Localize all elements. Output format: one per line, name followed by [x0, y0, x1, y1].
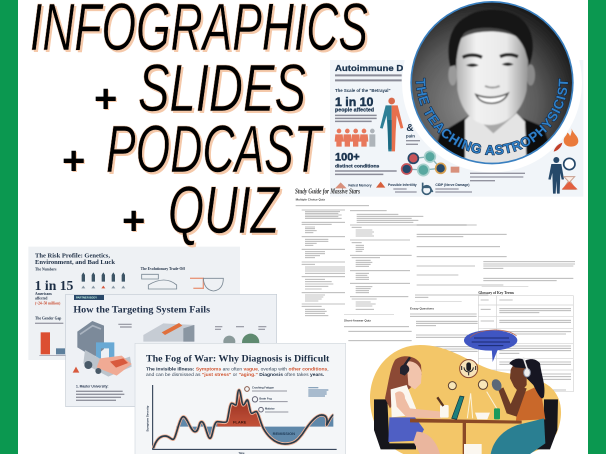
slide heading: The Risk Profile: Genetics, — [35, 254, 111, 260]
icon: failed memory — [335, 182, 347, 188]
section heading: 1. Master University: — [76, 384, 109, 388]
stat label: people affected: people affected — [335, 108, 374, 114]
label: failed memory: Failed Memory — [348, 183, 372, 187]
yellow blob — [370, 345, 561, 454]
white halo behind portrait — [402, 0, 582, 172]
icon: condition network — [402, 151, 459, 176]
table — [410, 419, 522, 454]
nerve damage detail lines — [435, 189, 472, 192]
glossary table — [478, 296, 573, 392]
essay heading: Essay Questions — [410, 307, 434, 311]
label: nerve damage: CIDP (Nerve Damage) — [435, 183, 470, 187]
tablet — [452, 396, 464, 419]
short answer heading: Short-Answer Quiz — [344, 319, 371, 323]
curved name text: THE TEACHING ASTROPHYSICIST — [416, 78, 568, 156]
subheading: gender gap: The Gender Gap — [35, 316, 61, 320]
quiz text column one — [296, 206, 369, 316]
gender gap note — [35, 321, 63, 325]
tote bag — [464, 444, 482, 454]
title shadow: + — [123, 200, 146, 244]
icon: infertility — [376, 182, 385, 188]
slide: targeting system — [66, 294, 277, 407]
chart legend lines — [308, 388, 328, 396]
icon: red slice — [554, 143, 562, 152]
title line: slides: SLIDES — [138, 51, 306, 126]
green can — [494, 408, 500, 419]
chart label: remission: REMISSION — [273, 431, 295, 436]
pain label: pain — [406, 133, 415, 138]
slide heading: How the Targeting System Fails — [73, 306, 210, 316]
stat: 1 in 10: 1 in 10 — [335, 95, 374, 109]
ampersand stat: & — [406, 123, 414, 134]
podcast illustration — [370, 330, 561, 454]
chairs — [374, 399, 558, 449]
title shadow: PODCAST — [108, 114, 326, 189]
title shadow: SLIDES — [140, 53, 308, 128]
slide: fog of war — [135, 343, 346, 454]
autoimmune infographic panel — [330, 60, 583, 197]
callout: fatigue: Crushing Fatigue — [252, 385, 274, 389]
illustration label lines — [118, 324, 132, 327]
blue ring — [410, 1, 574, 164]
conditions detail lines — [335, 171, 397, 174]
slide subheading line one: The Invisible Illness: Symptoms are often vague, overlap with other conditions , — [146, 367, 329, 372]
subheading: the numbers: The Numbers — [35, 267, 57, 271]
plus sign: + — [94, 77, 117, 121]
main title — [30, 0, 370, 250]
small floating icons — [448, 380, 488, 390]
title shadow: + — [95, 78, 118, 122]
document title: Study Guide for Massive Stars — [295, 187, 360, 195]
stat detail lines — [335, 115, 377, 121]
plus sign: + — [62, 139, 85, 183]
callout: brain fog — [252, 396, 288, 402]
glossary heading: Glossary of Key Terms — [478, 291, 515, 295]
slide: risk profile — [28, 247, 240, 360]
illustration: cells — [215, 327, 266, 351]
stat label: distinct conditions: distinct conditions — [335, 163, 380, 169]
sketch: trade-off diagrams — [142, 274, 223, 291]
title shadow: QUIZ — [170, 175, 282, 250]
essay lines — [410, 314, 478, 353]
axis label: severity: Symptom Severity — [146, 405, 150, 432]
quiz text column four — [483, 262, 575, 281]
portrait badge — [410, 1, 574, 164]
icon: row of figures — [81, 272, 125, 288]
bar chart: gender gap — [39, 332, 68, 356]
flare chart — [146, 385, 337, 454]
quiz text column three — [415, 225, 507, 297]
short answer lines — [344, 327, 412, 341]
stat: 100+: 100+ — [335, 152, 360, 164]
plus sign: + — [122, 199, 145, 243]
icon: figure with hourglass — [548, 157, 578, 194]
title shadow: + — [63, 140, 86, 184]
pain detail lines — [406, 141, 420, 144]
icon: microphone badge — [460, 360, 478, 378]
slide tag — [74, 295, 104, 300]
illustration: factory machine — [73, 321, 132, 377]
scale subheading: The Scale of the "Betrayal" — [335, 88, 391, 93]
stat: 1 in 15: 1 in 15 — [35, 278, 74, 293]
icon: row of people — [335, 129, 375, 147]
bowl — [475, 413, 490, 419]
callout: fatigue — [245, 385, 287, 391]
panel intro lines — [335, 75, 402, 80]
study guide document — [295, 187, 575, 392]
callout: brain fog: Brain Fog — [259, 396, 272, 400]
stat note: (~24–50 million) — [35, 301, 61, 305]
small label lines — [393, 189, 417, 192]
slide subheading line two: and can be dismissed as "just stress" or "aging." Diagnosis often takes years. — [146, 372, 324, 377]
stat label two: affected — [35, 296, 47, 300]
left host — [385, 356, 449, 454]
panel heading: Autoimmune D — [335, 63, 403, 73]
left green border — [0, 0, 18, 454]
section text lines — [76, 391, 124, 400]
right caption lines — [470, 173, 525, 181]
right green border — [588, 0, 606, 454]
title shadow — [32, 0, 370, 250]
label: infertility: Possible Infertility — [388, 183, 417, 187]
speech bubble — [464, 330, 517, 362]
callout: malaise — [259, 406, 288, 412]
chart label: flare: FLARE — [233, 419, 247, 424]
slide tag: PARTNER BODY — [76, 296, 97, 300]
right host — [490, 357, 545, 454]
icon: flame — [564, 128, 578, 147]
subheading: trade-off: The Evolutionary Trade-Off — [141, 267, 186, 271]
stat label: Americans — [35, 292, 52, 296]
multiple choice heading: Multiple Choice Quiz — [296, 198, 326, 202]
icon: body figure — [380, 98, 403, 151]
quiz text column two — [350, 211, 467, 309]
slide heading line two: Environment, and Bad Luck — [35, 260, 116, 266]
photo — [410, 0, 577, 167]
title line: quiz: QUIZ — [168, 173, 280, 248]
callout: malaise: Malaise — [265, 406, 275, 410]
icon: wheelchair — [422, 183, 433, 194]
microphone stand lines — [467, 392, 497, 418]
divider lines — [344, 287, 528, 315]
title line: podcast: PODCAST — [106, 112, 324, 187]
slide heading: The Fog of War: Why Diagnosis is Difficult — [146, 355, 330, 365]
illustration: conveyor — [143, 323, 195, 342]
